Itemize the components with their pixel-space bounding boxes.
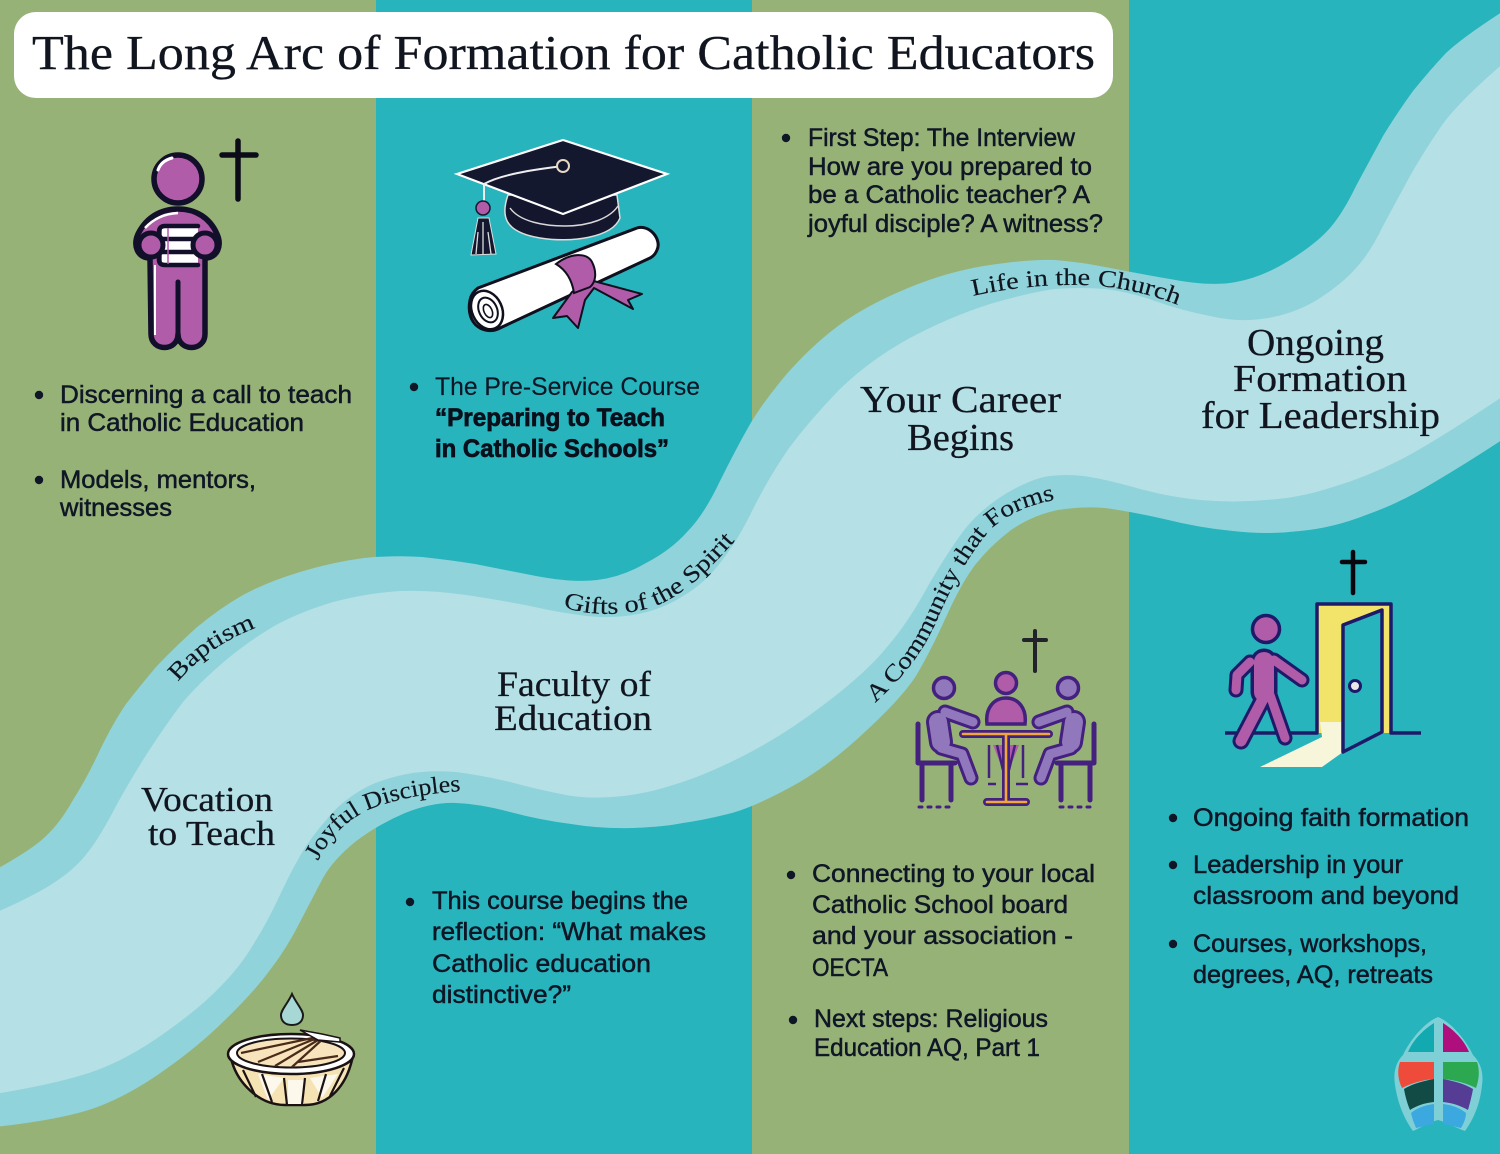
text: pre-service course: in Catholic Schools” [435, 435, 669, 463]
text: ongoing formation bullets: degrees, AQ, retreats [1193, 961, 1433, 989]
label: Joyful Disciples: Joyful Disciples [305, 776, 460, 860]
text: ongoing formation bullets: Courses, workshops, [1193, 930, 1427, 958]
text: pre-service course: The Pre-Service Course [435, 373, 700, 401]
title [14, 12, 1113, 98]
text: course reflection: distinctive?” [432, 981, 571, 1009]
text: local board and next steps: Catholic School board [812, 891, 1068, 919]
text: local board and next steps: Connecting to your local [812, 860, 1095, 888]
heading: Ongoing Formation for Leadership: Formation [1233, 358, 1407, 400]
text: course reflection: This course begins the [432, 887, 688, 915]
label: A Community that Forms: A Community that Forms [870, 489, 1054, 703]
icon: person holding books with cross [136, 141, 256, 348]
text: discernment bullets: Discerning a call to teach [60, 381, 352, 409]
text: local board and next steps: Next steps: Religious [814, 1005, 1048, 1033]
heading: Ongoing Formation for Leadership: Ongoing [1247, 322, 1384, 364]
text: course reflection: Catholic education [432, 950, 651, 978]
text: ongoing formation bullets: Leadership in your [1193, 851, 1403, 879]
text: first step interview: First Step: The Interview [808, 124, 1076, 152]
text: first step interview: be a Catholic teacher? A [808, 181, 1090, 209]
text: first step interview [782, 124, 1103, 238]
text: discernment bullets [35, 381, 352, 522]
title: The Long Arc of Formation for Catholic Educators [32, 25, 1095, 80]
text: local board and next steps: OECTA [812, 954, 888, 982]
icon: community around a table [918, 631, 1094, 807]
heading: Faculty of Education [494, 664, 652, 738]
text: local board and next steps: and your association - [812, 922, 1073, 950]
text: discernment bullets: in Catholic Education [60, 409, 304, 437]
heading: Your Career Begins: Begins [907, 417, 1014, 459]
heading: Faculty of Education: Education [494, 698, 652, 738]
label: Gifts of the Spirit: Gifts of the Spirit [565, 534, 735, 614]
heading: Ongoing Formation for Leadership: for Leadership [1201, 395, 1440, 437]
text: pre-service course [410, 373, 700, 463]
text: course reflection [406, 887, 706, 1009]
text: ongoing formation bullets: classroom and beyond [1193, 882, 1459, 910]
logo: mitre shield [1394, 1017, 1483, 1131]
text: discernment bullets: Models, mentors, [60, 466, 256, 494]
text: ongoing formation bullets [1169, 804, 1469, 989]
heading: Vocation to Teach: Vocation [141, 780, 273, 819]
icon: graduation cap and diploma [457, 140, 667, 334]
icon: person walking through open door [1225, 552, 1421, 767]
text: ongoing formation bullets: Ongoing faith formation [1193, 804, 1469, 832]
text: discernment bullets: witnesses [59, 494, 172, 522]
text: first step interview: joyful disciple? A witness? [807, 210, 1103, 238]
heading: Your Career Begins: Your Career [860, 379, 1061, 421]
text: pre-service course: “Preparing to Teach [435, 404, 665, 432]
text: local board and next steps [787, 860, 1095, 1062]
heading: Ongoing Formation for Leadership [1201, 322, 1440, 437]
text: course reflection: reflection: “What makes [432, 918, 706, 946]
icon: baptismal shell and water drop [228, 994, 354, 1105]
text: first step interview: How are you prepared to [808, 153, 1092, 181]
heading: Your Career Begins [860, 379, 1061, 459]
heading: Vocation to Teach [141, 780, 276, 853]
label: Baptism: Baptism [166, 619, 256, 682]
heading: Vocation to Teach: to Teach [148, 814, 276, 853]
text: local board and next steps: Education AQ, Part 1 [814, 1034, 1040, 1062]
heading: Faculty of Education: Faculty of [497, 664, 651, 704]
label: Life in the Church: Life in the Church [970, 268, 1179, 305]
